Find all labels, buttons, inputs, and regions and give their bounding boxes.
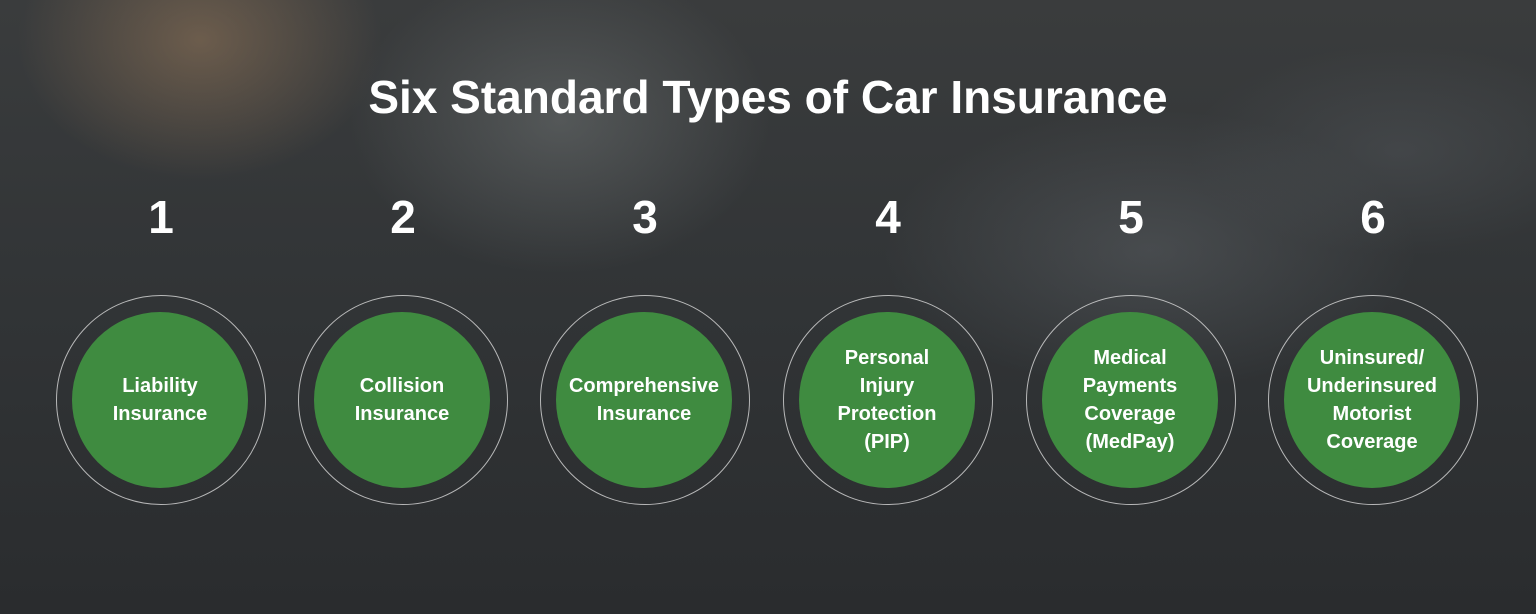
- item 6: [1268, 191, 1478, 505]
- item 1: 1: [148, 191, 174, 243]
- item 5: (MedPay): [1086, 431, 1174, 453]
- item 4: Protection: [838, 403, 936, 425]
- item 5: 5: [1118, 191, 1144, 243]
- item 6: Coverage: [1326, 431, 1418, 453]
- item 2: [298, 191, 508, 505]
- item 3: Insurance: [597, 403, 691, 425]
- item 1: [56, 191, 266, 505]
- item 4: [783, 191, 993, 505]
- item 2: Collision: [360, 375, 444, 397]
- item 5: [1026, 191, 1236, 505]
- item 1: Liability: [122, 375, 198, 397]
- item 5: Coverage: [1084, 403, 1176, 425]
- item 6: 6: [1360, 191, 1386, 243]
- item 4: Personal: [845, 347, 929, 369]
- item 6: Underinsured: [1307, 375, 1437, 397]
- item 4: (PIP): [864, 431, 910, 453]
- item 4: 4: [875, 191, 901, 243]
- item 4: Injury: [860, 375, 914, 397]
- item 3: Comprehensive: [569, 375, 719, 397]
- title: Six Standard Types of Car Insurance: [368, 71, 1168, 123]
- item 1: Insurance: [113, 403, 207, 425]
- item 6: Uninsured/: [1320, 347, 1424, 369]
- item 2: Insurance: [355, 403, 449, 425]
- item 2: 2: [390, 191, 416, 243]
- item 3: [540, 191, 750, 505]
- item 6: Motorist: [1333, 403, 1411, 425]
- item 5: Payments: [1083, 375, 1177, 397]
- item 3: 3: [632, 191, 658, 243]
- item 5: Medical: [1093, 347, 1167, 369]
